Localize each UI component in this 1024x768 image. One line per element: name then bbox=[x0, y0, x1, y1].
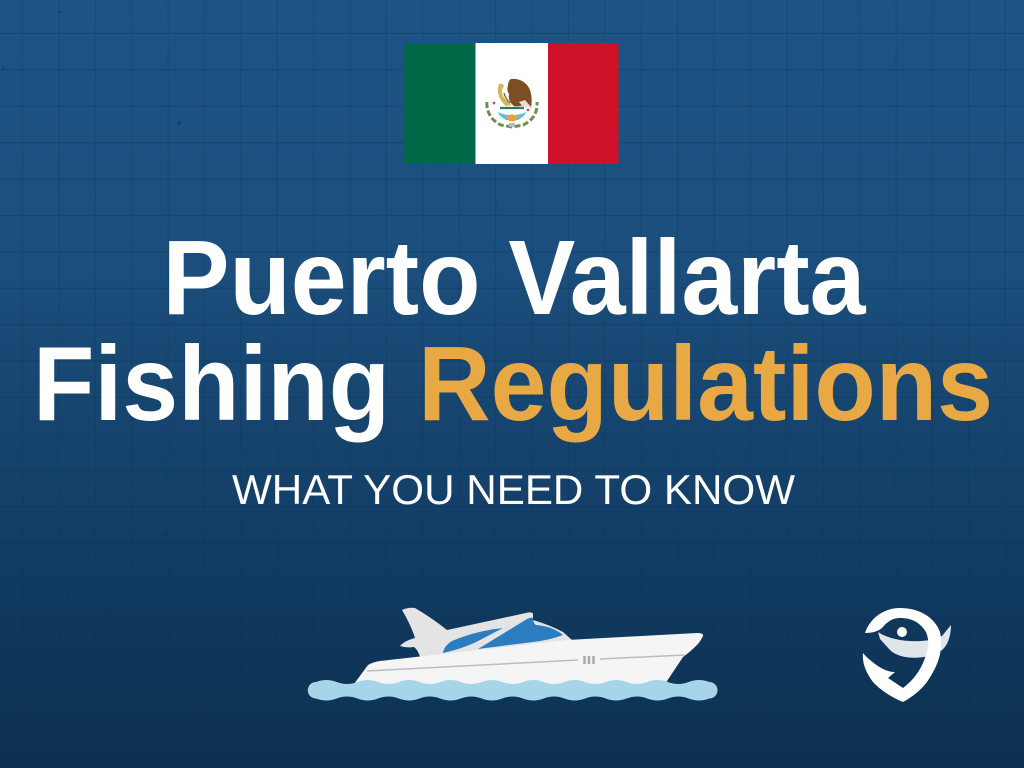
logo band bbox=[878, 625, 951, 658]
water waves bbox=[308, 680, 718, 700]
subtitle: WHAT YOU NEED TO KNOW bbox=[232, 466, 795, 513]
icon: flag emblem bbox=[487, 79, 537, 127]
icon: yacht on water bbox=[308, 608, 718, 700]
yacht hull stripe bbox=[367, 655, 685, 671]
title: Fishing Regulations bbox=[33, 325, 993, 443]
yacht windows bbox=[443, 628, 503, 653]
logo outline bbox=[863, 608, 941, 702]
yacht flybridge bbox=[400, 608, 572, 657]
logo eye bbox=[897, 627, 907, 637]
icon: Mexican flag bbox=[404, 43, 618, 164]
icon: fish hook logo bbox=[863, 608, 951, 702]
title: Puerto Vallarta bbox=[162, 219, 866, 337]
title bbox=[33, 219, 993, 443]
yacht hull bbox=[354, 633, 703, 684]
